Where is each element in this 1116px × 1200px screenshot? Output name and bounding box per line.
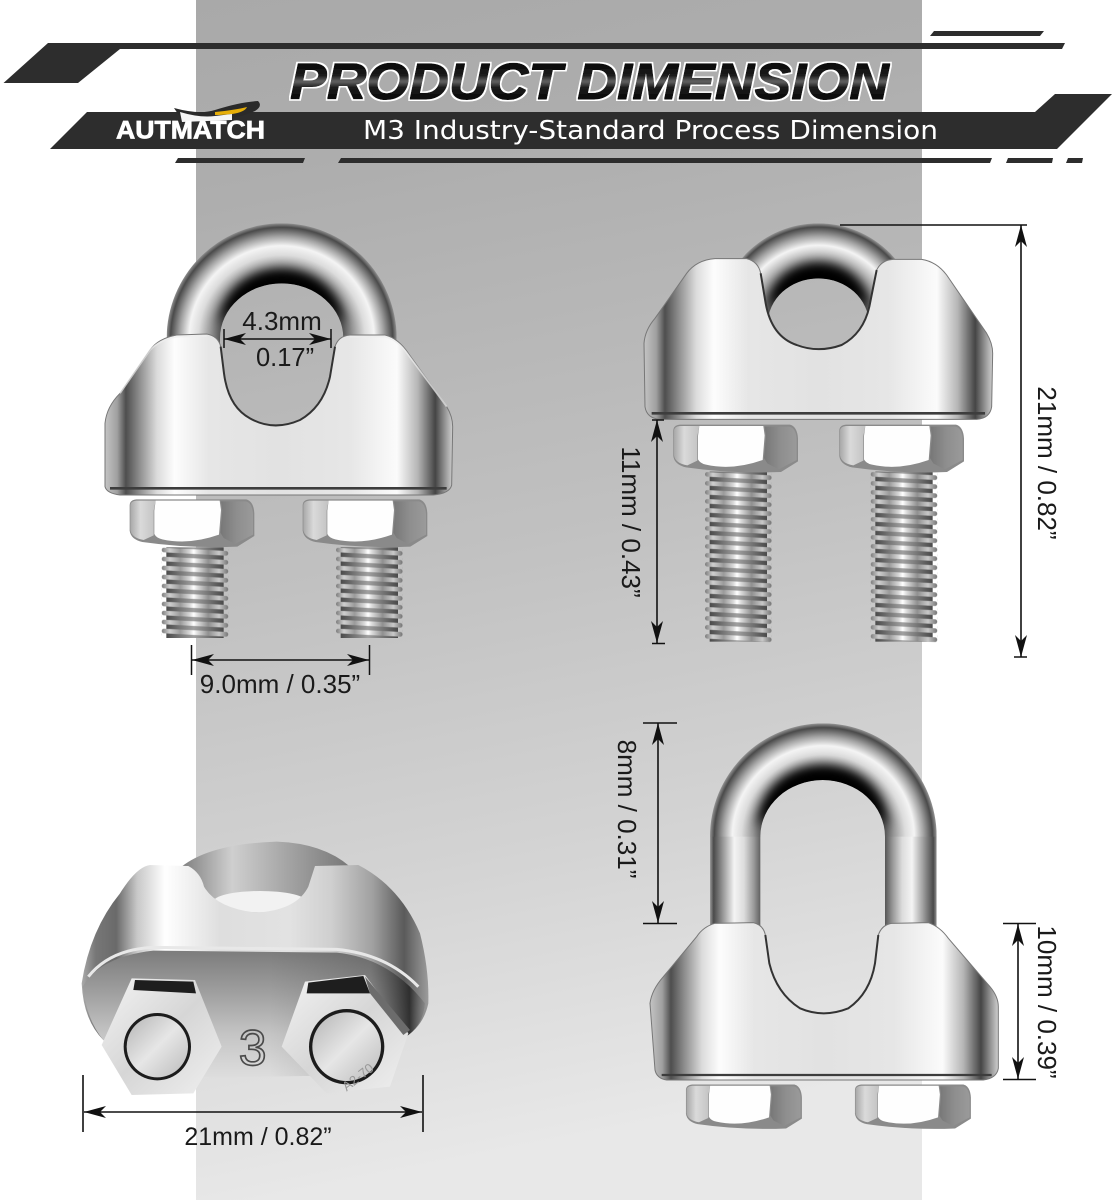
grey background panel bbox=[196, 0, 922, 1200]
clip body front view bbox=[105, 220, 453, 638]
dimension: 8mm / 0.31 inch: 8mm / 0.31” bbox=[612, 740, 642, 878]
bore highlight bbox=[213, 891, 307, 912]
title: PRODUCT DIMENSION bbox=[290, 53, 890, 110]
threaded bolts bbox=[162, 547, 403, 638]
top banner stripe bbox=[4, 43, 1065, 83]
dimension: 21mm / 0.82 inch: 21mm / 0.82” bbox=[1032, 386, 1062, 540]
saddle body bbox=[105, 334, 453, 495]
embossed number 3: 3 bbox=[239, 1020, 267, 1076]
dimension: 10mm / 0.39 inch: 10mm / 0.39” bbox=[1032, 925, 1062, 1079]
rim highlight bbox=[88, 947, 418, 987]
lower plate bbox=[83, 951, 425, 1078]
clip: rear view with dimensions 21mm and 11mm bbox=[616, 220, 1062, 657]
nuts bbox=[686, 1084, 971, 1129]
dimension: 4.3mm / 0.17 inch: 0.17” bbox=[256, 344, 314, 372]
dimension: 4.3mm / 0.17 inch: 4.3mm bbox=[242, 306, 322, 336]
logo: Autmatch: AUTMATCH bbox=[116, 116, 265, 144]
clip body rear view bbox=[644, 220, 993, 643]
clip body u-bolt view bbox=[650, 720, 998, 1129]
u-bolt arch bbox=[163, 220, 400, 347]
nut marking: A2-70 bbox=[339, 1060, 377, 1094]
dimension: 10mm / 0.39 inch bbox=[1003, 924, 1062, 1080]
small top right stripe bbox=[930, 31, 1044, 36]
logo: Autmatch bbox=[116, 101, 265, 144]
dimension: 9.0mm / 0.35 inch: 9.0mm / 0.35” bbox=[200, 669, 360, 699]
lower dashed stripes bbox=[175, 158, 1083, 163]
clip: front view with dimensions 4.3mm and 9.0mm bbox=[105, 220, 453, 699]
clip: end view with bolt heads and 21mm width bbox=[82, 842, 428, 1151]
header banner bbox=[4, 31, 1112, 163]
dimension: 21mm / 0.82 inch bbox=[840, 225, 1062, 657]
dimension: 21mm / 0.82 inch width bbox=[83, 1075, 423, 1151]
plate right shadow bbox=[270, 952, 425, 1077]
dimension: 4.3mm / 0.17 inch bbox=[224, 306, 331, 372]
saddle body bbox=[650, 923, 998, 1080]
dimension: 8mm / 0.31 inch bbox=[612, 723, 677, 924]
u-bolt dome bbox=[182, 842, 350, 917]
dimension: 21mm / 0.82 inch width: 21mm / 0.82” bbox=[184, 1123, 332, 1151]
u-bolt bbox=[708, 720, 938, 933]
threaded bolts bbox=[705, 472, 937, 643]
clip body end view bbox=[82, 842, 428, 1095]
dimension: 11mm / 0.43 inch bbox=[616, 420, 665, 644]
dimension: 9.0mm / 0.35 inch bbox=[192, 645, 370, 699]
u-bolt ring bbox=[742, 224, 895, 314]
nuts bbox=[673, 425, 964, 472]
subtitle: M3 Industry-Standard Process Dimension bbox=[363, 116, 938, 146]
main subtitle bar bbox=[50, 94, 1112, 149]
dimension: 11mm / 0.43 inch: 11mm / 0.43” bbox=[616, 446, 646, 598]
saddle body bbox=[644, 259, 993, 419]
saddle top surface bbox=[82, 865, 428, 1078]
left nut and bolt bbox=[102, 978, 222, 1095]
clip: disassembled u-bolt view with dimensions 8mm and 10mm bbox=[612, 720, 1062, 1129]
right nut and bolt bbox=[282, 975, 410, 1094]
nuts bbox=[130, 499, 427, 547]
